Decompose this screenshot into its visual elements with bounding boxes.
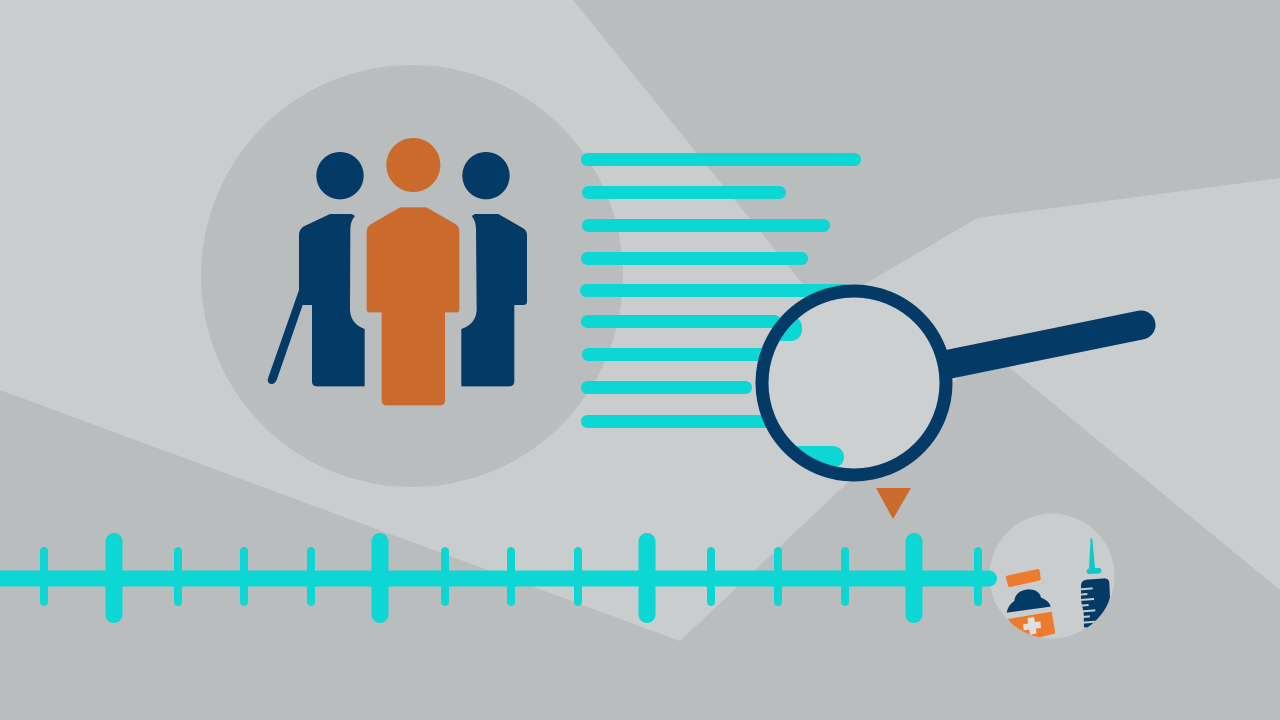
lens interior [762,291,946,475]
list of text lines [580,153,861,428]
icon: group of three people [268,138,527,405]
icon: syringe [1080,538,1110,627]
small circle with medication icons [990,514,1114,640]
timeline [0,533,997,623]
handle [945,325,1141,365]
icon: centre person [367,138,459,405]
icon: left person with cane [268,152,365,386]
backdrop circle behind people [201,65,623,487]
highlighted lines inside lens [780,318,844,467]
lens ring [762,291,946,475]
icon: medicine bottle [1006,569,1055,640]
magnifying glass [750,291,1141,475]
icon: right person [461,152,527,386]
marker triangle [876,488,911,519]
